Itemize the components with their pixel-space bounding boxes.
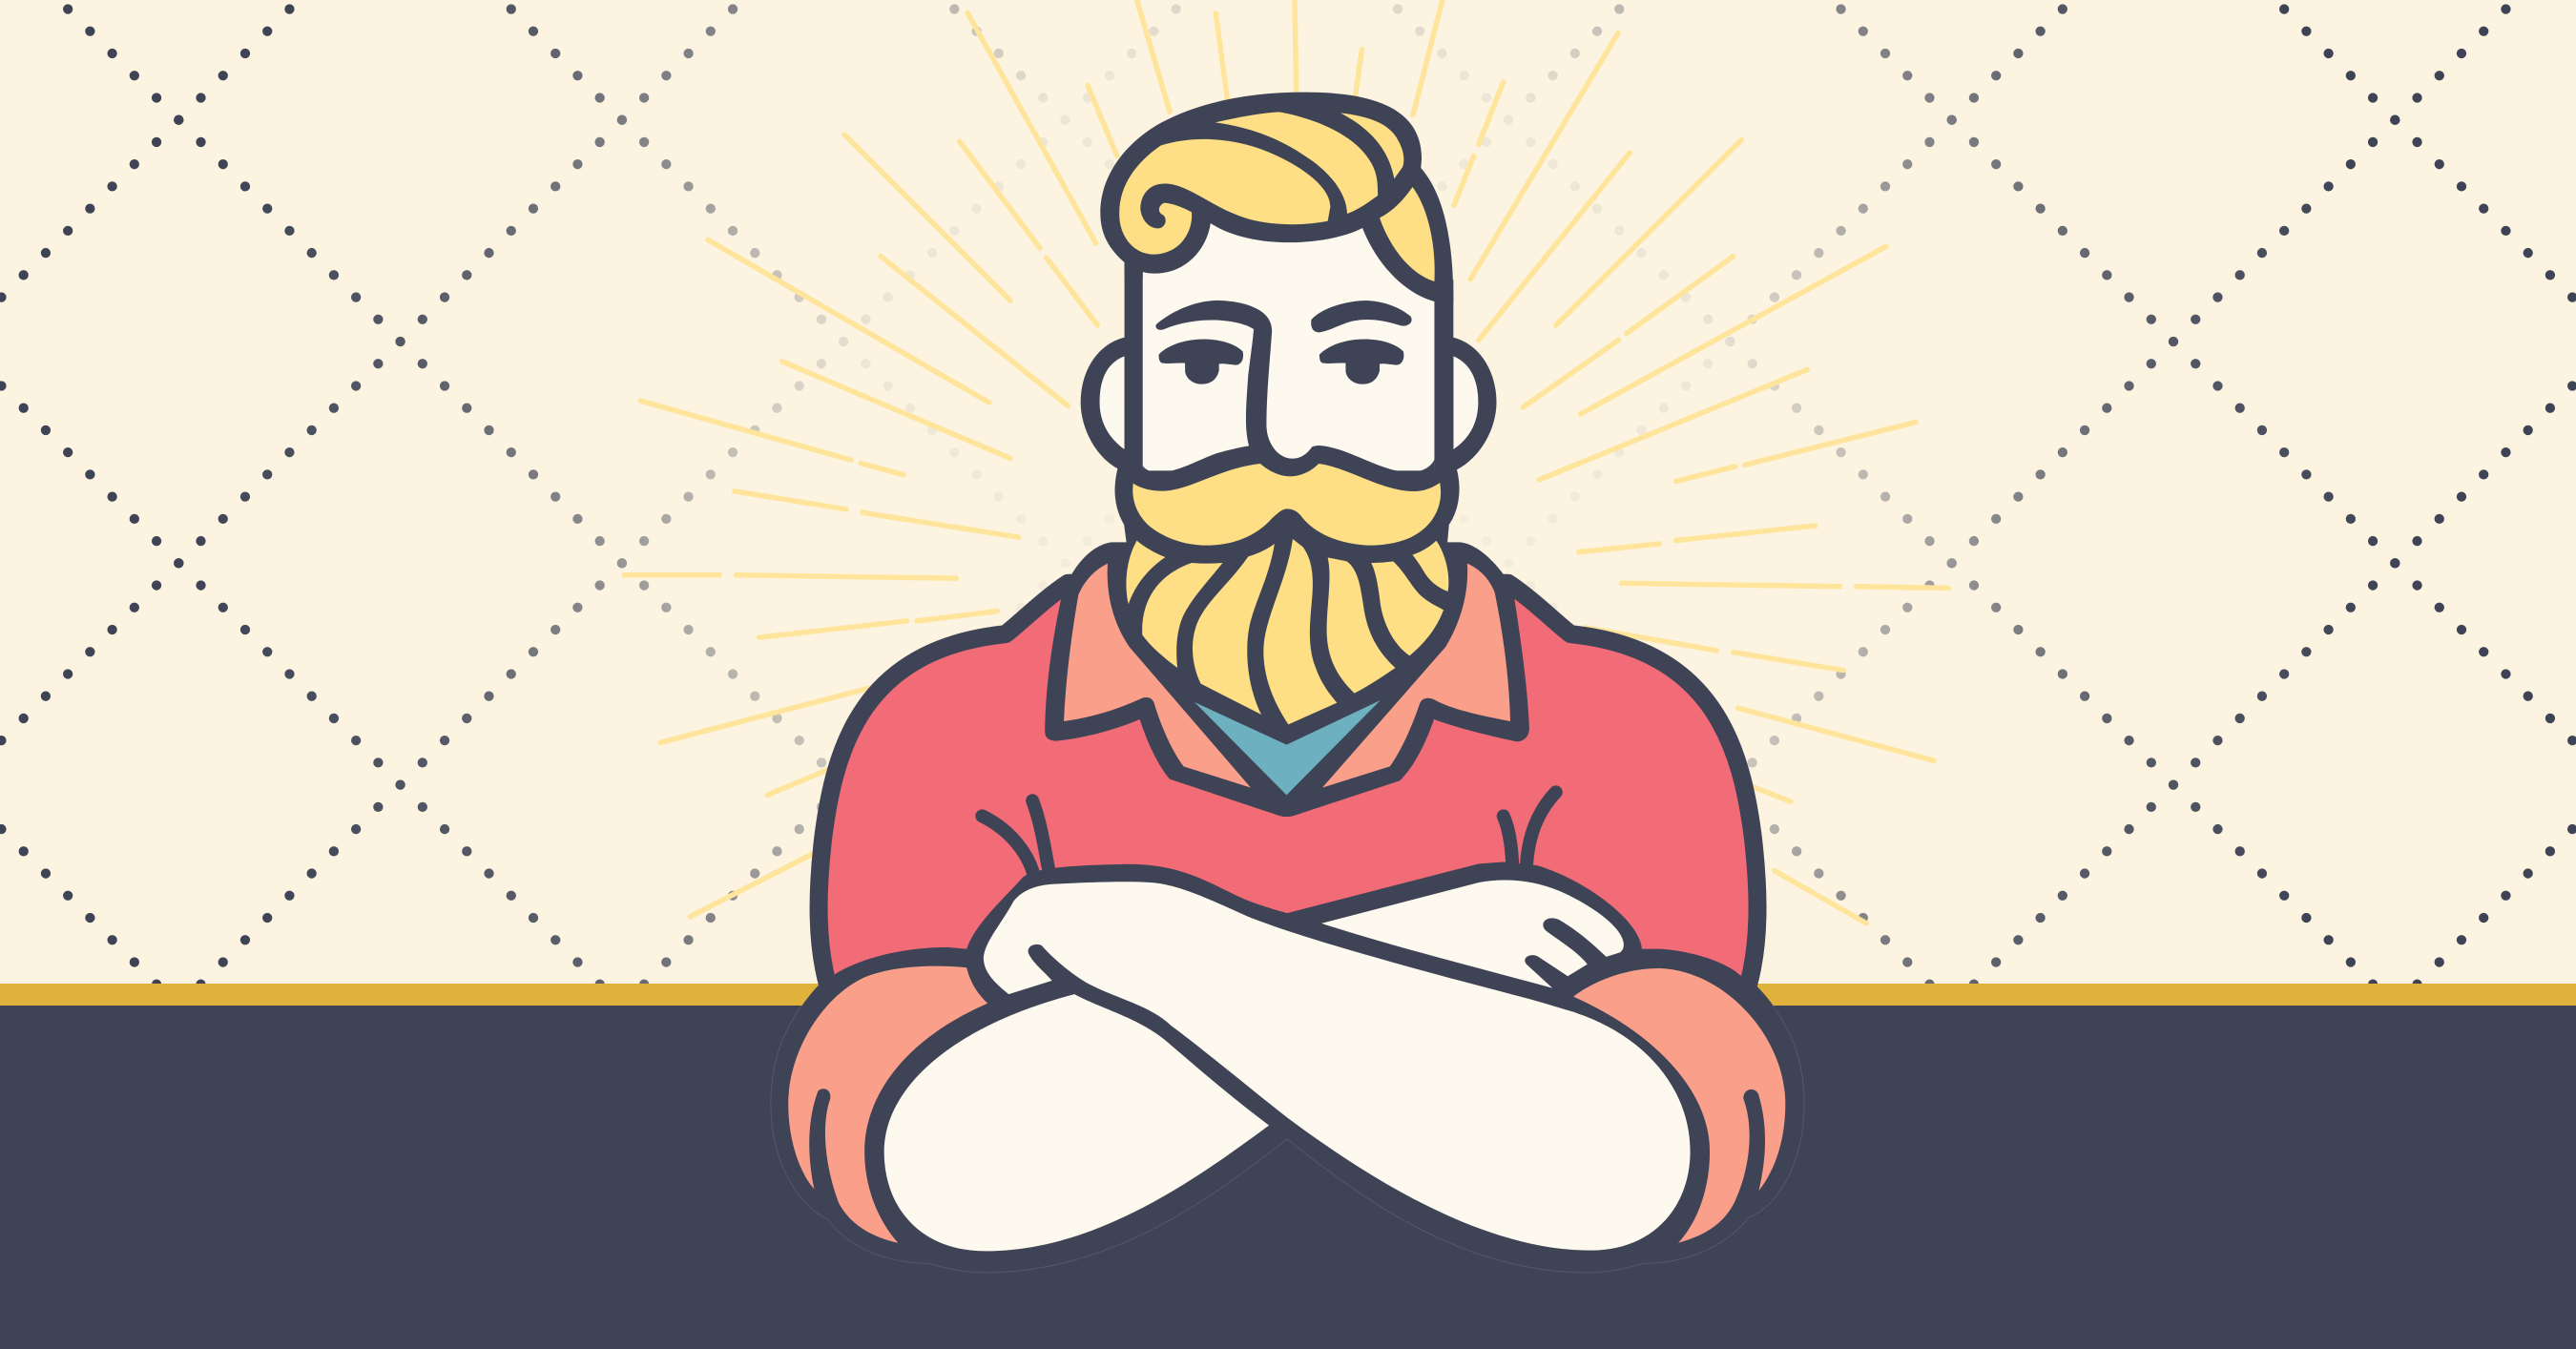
hair	[1100, 93, 1453, 302]
dotted diamond pattern	[0, 0, 2576, 998]
collar and scarf	[1045, 542, 1529, 817]
right collar flap	[1322, 564, 1510, 788]
sunburst rays	[624, 0, 1948, 924]
wrist lines right	[1504, 792, 1556, 865]
right sleeve	[1573, 968, 1785, 1243]
moustache	[1132, 464, 1441, 546]
brow, nose and moustache top	[1143, 301, 1434, 503]
halo outline	[771, 1006, 1804, 1273]
face	[1143, 217, 1434, 470]
right eyebrow	[1311, 301, 1412, 332]
beard	[1126, 539, 1448, 724]
left sleeve	[788, 966, 987, 1243]
arms	[771, 792, 1804, 1273]
right eye	[1319, 340, 1403, 384]
left collar flap	[1064, 564, 1251, 788]
face side lines	[1125, 260, 1453, 474]
man illustration	[771, 93, 1804, 1273]
wrist lines left	[982, 800, 1049, 879]
moustache backing	[1115, 467, 1460, 566]
head	[1081, 93, 1496, 566]
left eye	[1159, 340, 1243, 384]
gold wainscot band	[0, 984, 2576, 1006]
dot fade toward centre	[0, 0, 2576, 992]
arm silhouette	[771, 862, 1804, 1273]
right ear	[1452, 337, 1496, 470]
sweater torso	[819, 583, 1757, 1085]
hand tucked under arm	[1321, 881, 1624, 988]
teal neck scarf	[1195, 700, 1381, 795]
lower left forearm	[884, 994, 1269, 1251]
navy floor panel	[0, 1006, 2576, 1349]
left ear	[1081, 337, 1126, 470]
background wallpaper	[0, 0, 2576, 992]
collar outline	[1045, 542, 1529, 817]
top forearm and hand	[984, 882, 1691, 1251]
